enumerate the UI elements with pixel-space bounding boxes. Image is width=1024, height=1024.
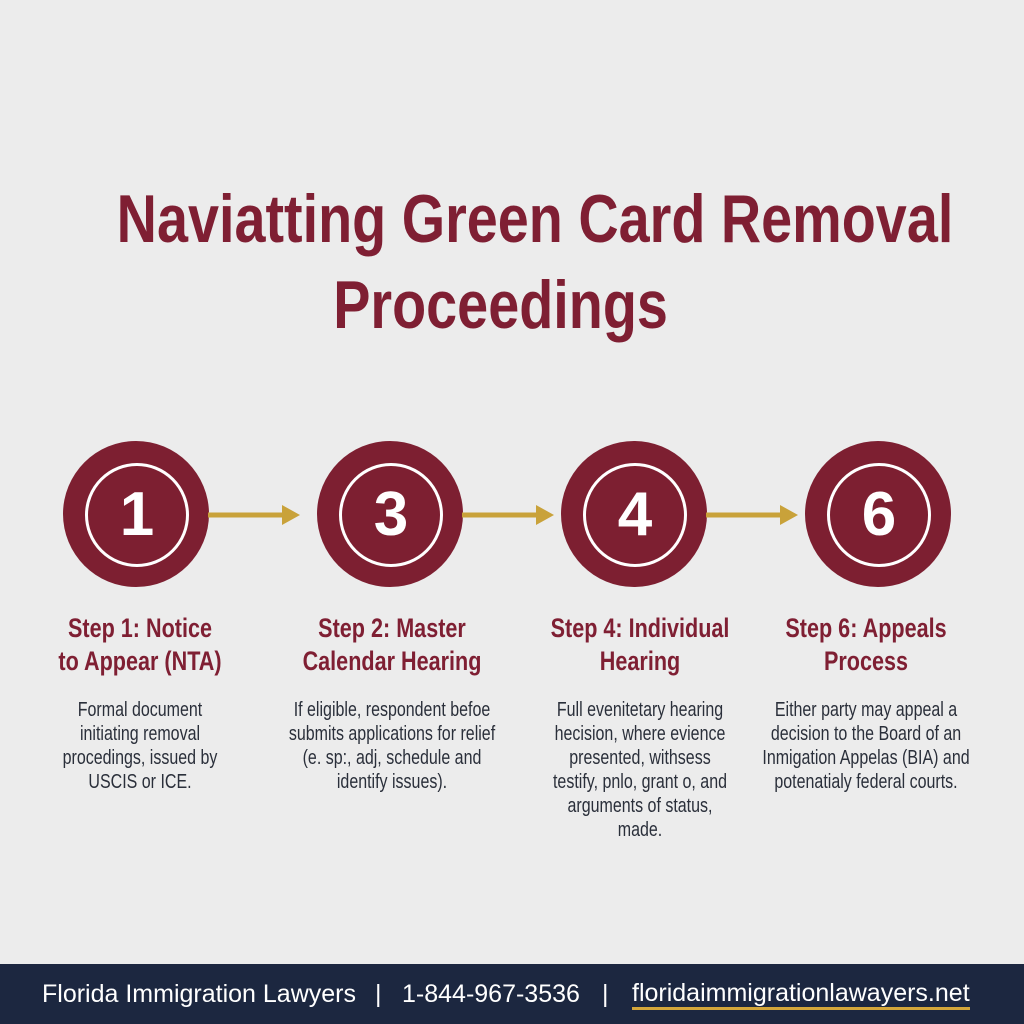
step 4 text: Step 4: Individual	[551, 613, 729, 643]
step 4 text: Hearing	[600, 646, 680, 676]
step 1 text: Formal document	[78, 699, 202, 721]
step circle 1	[63, 441, 209, 587]
footer	[0, 964, 1024, 1024]
title: Proceedings	[333, 267, 668, 343]
step 4 text	[551, 613, 729, 841]
step 1 text: USCIS or ICE.	[88, 771, 192, 793]
step 6 text	[762, 613, 970, 793]
step 4 text: arguments of status,	[568, 795, 712, 817]
step 2 text: Step 2: Master	[318, 613, 466, 643]
title: Naviatting Green Card Removal	[117, 181, 953, 257]
step 2 text: identify issues).	[337, 771, 447, 793]
step 4 text: presented, withsess	[569, 747, 711, 769]
step 2 text: (e. sp:, adj, schedule and	[303, 747, 481, 769]
step 6 text: Step 6: Appeals	[785, 613, 947, 643]
step circle 3: 3	[374, 480, 408, 549]
step 6 text: potenatialy federal courts.	[774, 771, 958, 793]
step 4 text: testify, pnlo, grant o, and	[553, 771, 727, 793]
step circle 1: 1	[120, 480, 154, 549]
step circle 3	[317, 441, 463, 587]
arrow 1	[208, 505, 300, 525]
footer: 1-844-967-3536	[402, 980, 580, 1008]
arrow 2	[462, 505, 554, 525]
arrow 3	[706, 505, 798, 525]
footer: floridaimmigrationlawayers.net	[632, 979, 970, 1007]
step 1 text: initiating removal	[80, 723, 200, 745]
step 1 text: Step 1: Notice	[68, 613, 212, 643]
step circle 4	[561, 441, 707, 587]
step 2 text: submits applications for relief	[289, 723, 495, 745]
step 2 text: If eligible, respondent befoe	[294, 699, 490, 721]
step 1 text: procedings, issued by	[63, 747, 217, 769]
step 6 text: Inmigation Appelas (BIA) and	[762, 747, 970, 769]
step 6 text: Process	[824, 646, 908, 676]
step circle 6: 6	[862, 480, 896, 549]
footer: |	[375, 980, 382, 1008]
step 4 text: hecision, where evience	[555, 723, 725, 745]
footer: |	[602, 980, 608, 1008]
step 1 text	[58, 613, 222, 793]
title	[117, 181, 953, 343]
footer: Florida Immigration Lawyers	[42, 980, 356, 1008]
step 6 text: Either party may appeal a	[775, 699, 957, 721]
step 4 text: made.	[618, 819, 662, 841]
step circle 6	[805, 441, 951, 587]
step 2 text: Calendar Hearing	[303, 646, 481, 676]
step 6 text: decision to the Board of an	[771, 723, 961, 745]
step 2 text	[289, 613, 496, 793]
step circle 4: 4	[618, 480, 652, 549]
step 4 text: Full evenitetary hearing	[557, 699, 723, 721]
step 1 text: to Appear (NTA)	[58, 646, 222, 676]
